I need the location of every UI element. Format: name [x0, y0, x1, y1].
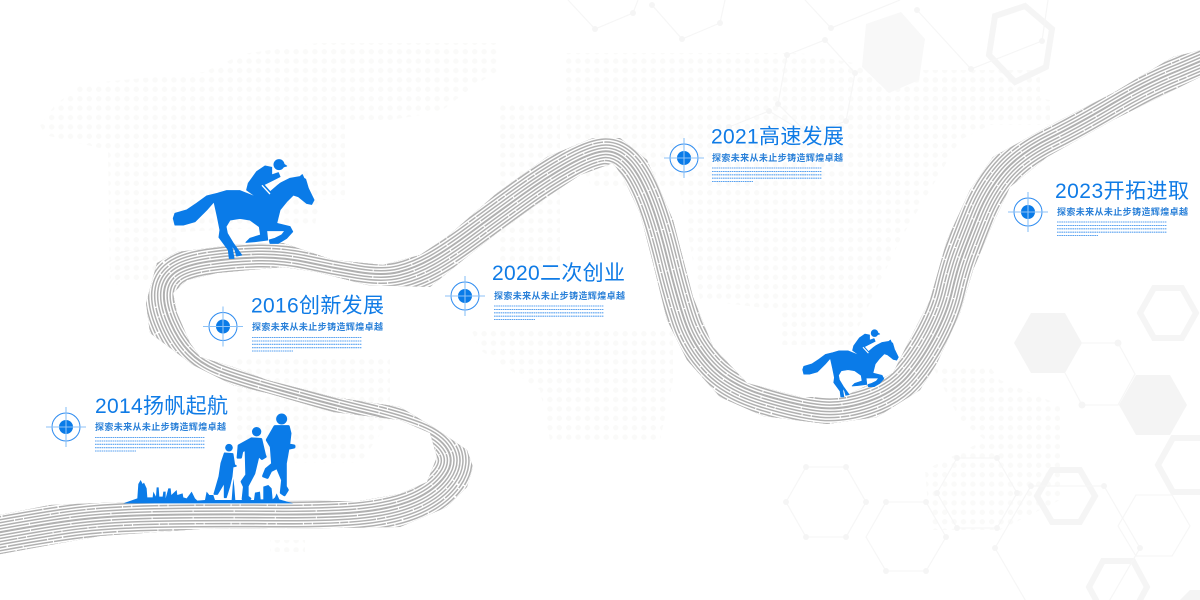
winding road: [0, 55, 1200, 534]
icon: target: [203, 306, 243, 346]
title: 2020二次创业: [492, 262, 625, 285]
skyline: [123, 478, 293, 503]
runners and city skyline: [123, 415, 294, 503]
title: 2021高速发展: [711, 126, 844, 148]
small horse and jockey: [803, 330, 898, 397]
icon: target: [46, 407, 86, 447]
big horse and jockey: [173, 160, 314, 258]
background: hexagon network: [568, 0, 1200, 600]
title: 2014扬帆起航: [95, 395, 228, 418]
background: dotted world map: [40, 43, 1060, 552]
title: 2016创新发展: [251, 294, 384, 318]
icon: target: [1008, 192, 1048, 232]
milestone 2016: [203, 294, 384, 351]
body text lines: [252, 338, 362, 351]
milestone 2020: [445, 262, 625, 320]
milestone 2021: [664, 126, 844, 182]
milestone 2014: [46, 395, 228, 451]
icon: target: [664, 138, 704, 178]
subtitle: 探索未来从未止步铸造辉煌卓越: [95, 421, 226, 432]
runner: small: [214, 445, 236, 497]
subtitle: 探索未来从未止步铸造辉煌卓越: [1057, 206, 1188, 217]
runner: large: [264, 415, 294, 495]
icon: target: [445, 276, 485, 316]
body text lines: [712, 168, 822, 182]
subtitle: 探索未来从未止步铸造辉煌卓越: [712, 152, 843, 163]
body text lines: [95, 438, 205, 451]
milestone 2023: [1008, 180, 1189, 236]
title: 2023开拓进取: [1055, 180, 1189, 203]
body text lines: [494, 306, 604, 320]
runner: middle: [238, 428, 265, 499]
subtitle: 探索未来从未止步铸造辉煌卓越: [494, 290, 625, 301]
subtitle: 探索未来从未止步铸造辉煌卓越: [252, 321, 383, 332]
body text lines: [1057, 222, 1167, 236]
